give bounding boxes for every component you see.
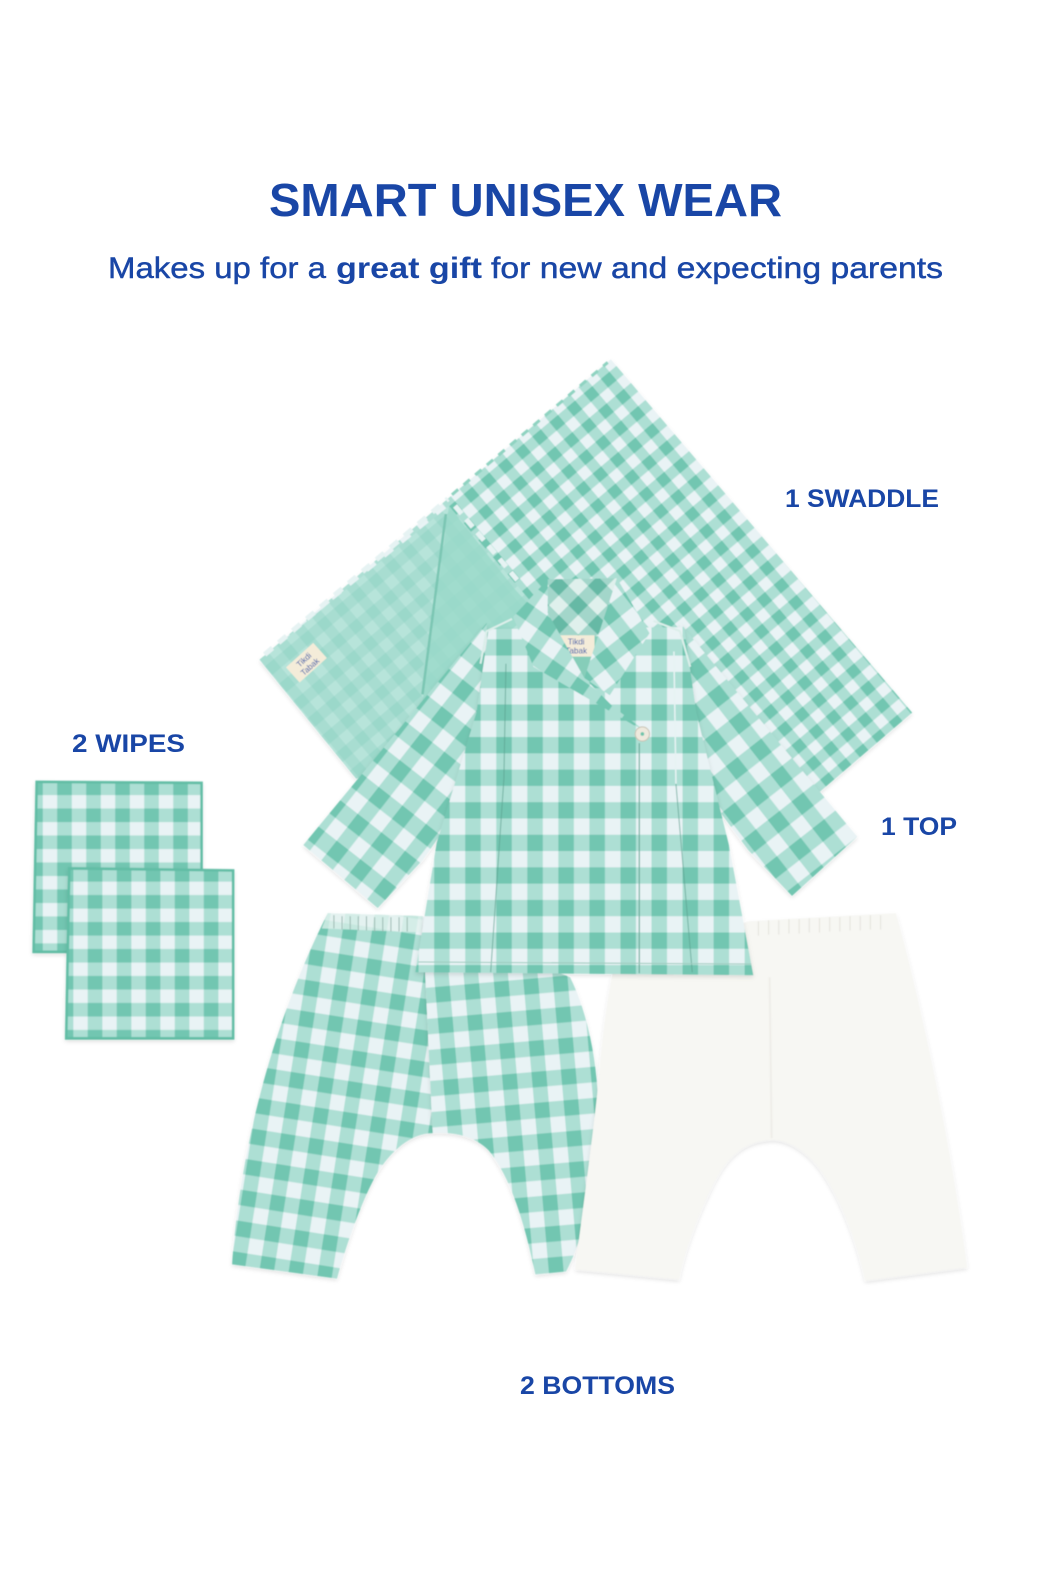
collar left wrap bbox=[513, 579, 642, 729]
neck label bbox=[558, 635, 595, 657]
top / shirt bbox=[303, 578, 857, 975]
label: 2 wipes: 2 WIPES bbox=[72, 730, 185, 758]
right sleeve bbox=[680, 623, 857, 896]
collar right bbox=[584, 578, 649, 695]
neck label: Tikdi bbox=[568, 637, 585, 646]
subtitle bbox=[108, 252, 943, 285]
swaddle label tag: Tikdi bbox=[295, 651, 313, 669]
label: 2 bottoms: 2 BOTTOMS bbox=[520, 1372, 675, 1400]
back wipe bbox=[34, 782, 202, 952]
left sleeve bbox=[303, 623, 491, 908]
label: 1 top: 1 TOP bbox=[881, 813, 957, 841]
subtitle: Makes up for a bbox=[108, 252, 326, 285]
subtitle: for new and expecting parents bbox=[491, 252, 943, 285]
shoulder seams and pleats bbox=[418, 619, 751, 973]
button bbox=[635, 727, 649, 741]
wipes bbox=[34, 782, 233, 1038]
swaddle label tag: Tabak bbox=[299, 656, 322, 678]
gingham bottoms bbox=[232, 913, 598, 1279]
title: SMART UNISEX WEAR bbox=[269, 174, 782, 226]
swaddle bbox=[260, 359, 912, 792]
shirt body bbox=[415, 627, 753, 975]
subtitle: great gift bbox=[336, 252, 482, 285]
inner neck bbox=[548, 578, 617, 678]
garments illustration bbox=[34, 359, 967, 1281]
neck label: Tabak bbox=[565, 647, 588, 656]
swaddle label tag bbox=[286, 643, 327, 683]
label: 1 swaddle: 1 SWADDLE bbox=[785, 485, 939, 513]
front wipe bbox=[66, 868, 233, 1038]
white bottoms bbox=[575, 913, 967, 1281]
